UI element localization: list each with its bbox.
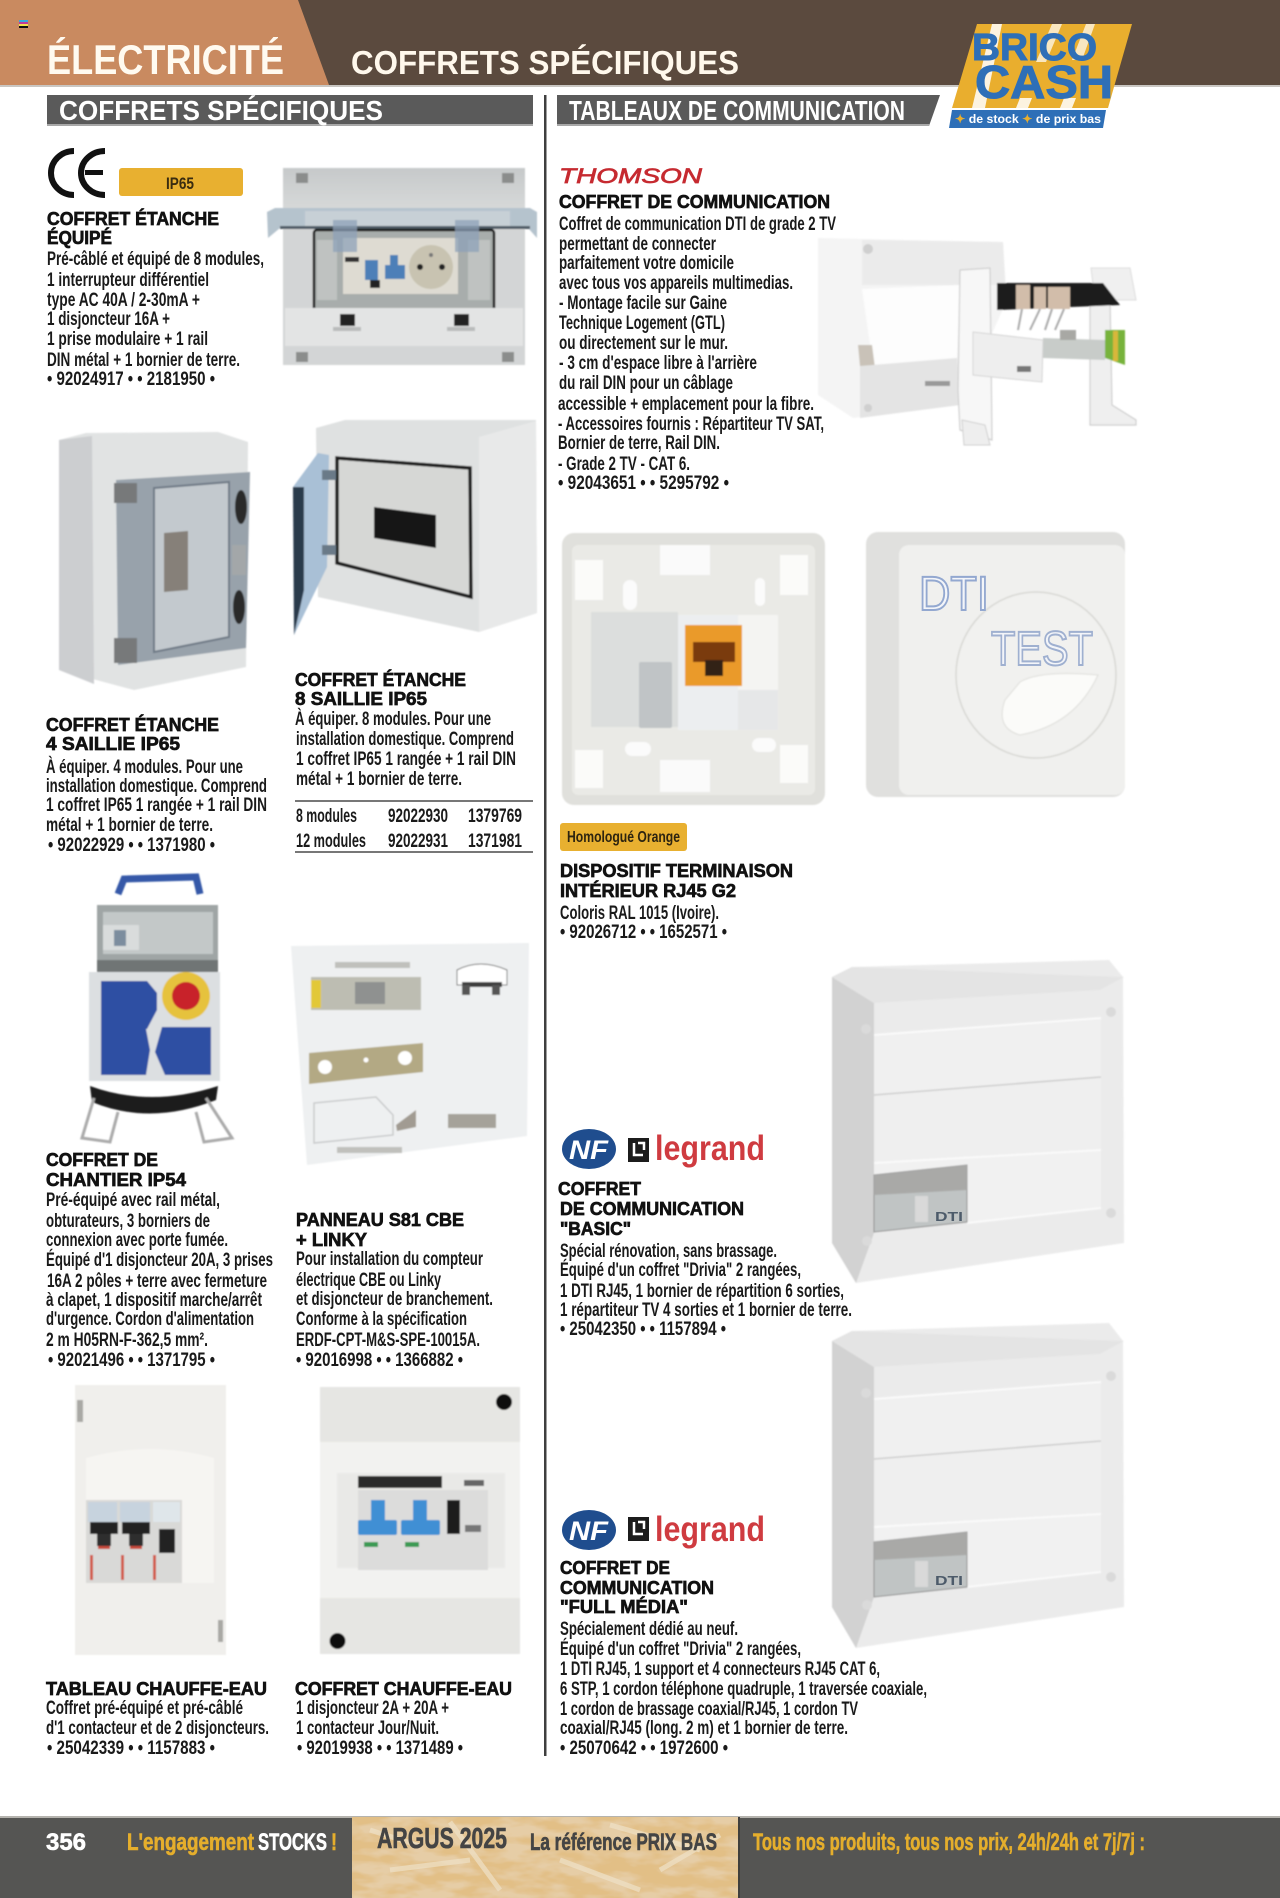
- text: dispositif terminaison: • 92026712 • • 1652571 •: [560, 922, 727, 943]
- heading: coffrets spécifiques: COFFRETS SPÉCIFIQUES: [59, 95, 383, 126]
- logo: NF legrand basic: [562, 1129, 765, 1169]
- text: coffret de chantier: 16A 2 pôles + terre avec fermeture: [47, 1271, 267, 1292]
- text: coffret étanche équipé: Pré-câblé et équipé de 8 modules,: [47, 249, 264, 270]
- text: coffret de communication full média: [560, 1557, 927, 1759]
- text: coffret étanche équipé: 1 interrupteur différentiel: [47, 270, 209, 291]
- text: coffret de communication Thomson: [558, 191, 836, 494]
- logo: NF legrand basic: NF: [569, 1135, 610, 1165]
- table: références 8 et 12 modules: 8 modules: [296, 806, 357, 827]
- table: références 8 et 12 modules: 92022931: [388, 831, 448, 852]
- label: DTI TEST: TEST: [991, 623, 1093, 676]
- text: coffret chauffe-eau: • 92019938 • • 1371489 •: [297, 1738, 463, 1759]
- text: dispositif terminaison: INTÉRIEUR RJ45 G2: [560, 880, 736, 901]
- product image: coffret étanche 4 saillie: [59, 432, 250, 690]
- text: coffret de communication basic: 1 répartiteur TV 4 sorties et 1 bornier de terre.: [560, 1300, 852, 1321]
- text: coffret étanche 4 saillie: métal + 1 bornier de terre.: [46, 815, 213, 836]
- table: références 8 et 12 modules: 12 modules: [296, 831, 366, 852]
- text: coffret de communication full média: Spécialement dédié au neuf.: [560, 1619, 738, 1640]
- text: coffret étanche 8 saillie: 1 coffret IP65 1 rangée + 1 rail DIN: [296, 749, 516, 770]
- text: coffret de chantier: d'urgence. Cordon d'alimentation: [46, 1309, 254, 1330]
- text: coffret de communication full média: 1 cordon de brassage coaxial/RJ45, 1 cordon TV: [560, 1699, 858, 1720]
- text: coffret de communication Thomson: - Montage facile sur Gaine: [559, 293, 727, 314]
- header band: [0, 0, 1280, 87]
- text: coffret de communication Thomson: ou directement sur le mur.: [559, 333, 728, 354]
- product image: coffret Thomson: [818, 238, 1136, 445]
- table: références 8 et 12 modules: 1379769: [468, 806, 522, 827]
- text: coffret étanche équipé: 1 prise modulaire + 1 rail: [47, 329, 208, 350]
- product image: coffret full média: [832, 1323, 1124, 1648]
- footer: engagement stocks: STOCKS: [258, 1829, 327, 1856]
- logo: NF legrand full média: legrand: [655, 1510, 765, 1549]
- badge: homologué orange: Homologué Orange: [567, 829, 680, 846]
- text: coffret étanche équipé: DIN métal + 1 bornier de terre.: [47, 350, 240, 371]
- text: coffret étanche 8 saillie: installation domestique. Comprend: [296, 729, 514, 750]
- table: références 8 et 12 modules: 1371981: [468, 831, 522, 852]
- text: dispositif terminaison: Coloris RAL 1015 (Ivoire).: [560, 903, 719, 924]
- text: coffret de communication Thomson: parfaitement votre domicile: [559, 253, 734, 274]
- text: coffret étanche 8 saillie: À équiper. 8 modules. Pour une: [295, 708, 491, 730]
- label: DTI TEST: DTI: [919, 568, 989, 621]
- text: coffret étanche 4 saillie: 4 SAILLIE IP65: [46, 733, 180, 754]
- text: coffret de communication Thomson: COFFRET DE COMMUNICATION: [559, 191, 830, 212]
- product image: coffret étanche équipé: [267, 168, 537, 365]
- text: panneau S81 CBE + Linky: + LINKY: [296, 1229, 368, 1250]
- text: coffret de chantier: connexion avec porte fumée.: [46, 1230, 228, 1251]
- text: panneau S81 CBE + Linky: [296, 1209, 493, 1371]
- text: tableau chauffe-eau: TABLEAU CHAUFFE-EAU: [46, 1678, 267, 1699]
- text: coffret de chantier: [46, 1149, 273, 1371]
- footer band: [0, 1816, 1280, 1898]
- text: panneau S81 CBE + Linky: électrique CBE ou Linky: [296, 1270, 441, 1291]
- logo: NF legrand full média: NF: [569, 1516, 610, 1546]
- text: coffret de communication full média: Équipé d'un coffret "Drivia" 2 rangées,: [560, 1638, 801, 1660]
- text: coffret de communication Thomson: - Grade 2 TV - CAT 6.: [558, 454, 690, 475]
- table: références 8 et 12 modules: [295, 800, 533, 853]
- text: coffret de communication full média: COFFRET DE: [560, 1557, 670, 1578]
- text: coffret étanche 8 saillie: métal + 1 bornier de terre.: [296, 769, 462, 790]
- text: tableau chauffe-eau: d'1 contacteur et de 2 disjoncteurs.: [46, 1718, 269, 1739]
- badge: homologué orange: [560, 823, 687, 851]
- text: coffret de communication Thomson: Bornier de terre, Rail DIN.: [558, 433, 720, 454]
- logo: Brico Cash: [949, 24, 1132, 128]
- text: coffret de communication full média: "FULL MÉDIA": [560, 1596, 688, 1617]
- text: coffret de communication full média: COMMUNICATION: [560, 1577, 714, 1598]
- text: coffret étanche 4 saillie: À équiper. 4 modules. Pour une: [46, 756, 243, 778]
- footer: engagement stocks: L'engagement: [127, 1829, 254, 1856]
- text: coffret de communication Thomson: Coffret de communication DTI de grade 2 TV: [559, 214, 836, 235]
- product image: tableau chauffe-eau: [75, 1385, 226, 1655]
- logo: NF legrand full média: [562, 1510, 765, 1550]
- text: coffret de chantier: • 92021496 • • 1371795 •: [48, 1350, 215, 1371]
- text: coffret de communication Thomson: du rail DIN pour un câblage: [559, 373, 733, 394]
- text: coffret de communication Thomson: accessible + emplacement pour la fibre.: [558, 394, 814, 415]
- product image: DTI test: [866, 532, 1125, 797]
- text: coffret étanche 4 saillie: • 92022929 • • 1371980 •: [48, 835, 215, 856]
- text: panneau S81 CBE + Linky: PANNEAU S81 CBE: [296, 1209, 464, 1230]
- label: DTI TEST: [919, 568, 1093, 676]
- label: DTI module full média: DTI: [935, 1573, 963, 1588]
- text: coffret de chantier: COFFRET DE: [46, 1149, 158, 1170]
- text: coffret de communication Thomson: permettant de connecter: [559, 234, 716, 255]
- product image: dispositif terminaison RJ45: [562, 533, 825, 805]
- text: panneau S81 CBE + Linky: Pour installation du compteur: [296, 1249, 483, 1270]
- text: coffret de communication basic: DE COMMUNICATION: [560, 1198, 744, 1219]
- text: tableau chauffe-eau: • 25042339 • • 1157883 •: [47, 1738, 215, 1759]
- text: coffret de chantier: Pré-équipé avec rail métal,: [46, 1190, 220, 1211]
- text: coffret étanche équipé: ÉQUIPÉ: [47, 227, 112, 248]
- text: panneau S81 CBE + Linky: et disjoncteur de branchement.: [296, 1289, 493, 1310]
- text: panneau S81 CBE + Linky: ERDF-CPT-M&S-SPE-10015A.: [296, 1330, 480, 1351]
- text: coffret de communication full média: coaxial/RJ45 (long. 2 m) et 1 bornier de terre.: [560, 1718, 848, 1739]
- text: coffret de communication basic: [558, 1178, 852, 1340]
- text: coffret étanche 8 saillie: 8 SAILLIE IP65: [295, 688, 427, 709]
- text: panneau S81 CBE + Linky: Conforme à la spécification: [296, 1309, 467, 1330]
- text: coffret de communication basic: • 25042350 • • 1157894 •: [560, 1319, 726, 1340]
- text: coffret étanche 8 saillie: [295, 669, 516, 790]
- icon: CE mark: [51, 151, 105, 195]
- text: coffret étanche équipé: [47, 208, 264, 390]
- header band: ÉLECTRICITÉ: [47, 36, 284, 83]
- text: dispositif terminaison: DISPOSITIF TERMINAISON: [560, 860, 793, 881]
- footer: argus 2025: [377, 1823, 717, 1856]
- text: coffret étanche 4 saillie: installation domestique. Comprend: [46, 776, 267, 797]
- text: coffret étanche équipé: type AC 40A / 2-30mA +: [47, 290, 200, 311]
- product image: coffret basic: [832, 960, 1124, 1283]
- header band: COFFRETS SPÉCIFIQUES: [351, 44, 739, 81]
- text: coffret de communication basic: COFFRET: [558, 1178, 642, 1199]
- logo: NF legrand basic: legrand: [655, 1129, 765, 1168]
- footer: engagement stocks: !: [331, 1829, 337, 1856]
- text: tableau chauffe-eau: [46, 1678, 269, 1759]
- table: références 8 et 12 modules: 92022930: [388, 806, 448, 827]
- text: coffret étanche équipé: COFFRET ÉTANCHE: [47, 208, 219, 229]
- text: coffret de communication full média: 6 STP, 1 cordon téléphone quadruple, 1 traversée coaxiale,: [560, 1679, 927, 1700]
- text: coffret de chantier: 2 m H05RN-F-362,5 mm².: [46, 1330, 208, 1351]
- text: coffret chauffe-eau: COFFRET CHAUFFE-EAU: [295, 1678, 512, 1699]
- text: coffret de chantier: CHANTIER IP54: [46, 1169, 187, 1190]
- logo: Brico Cash: ✦ de stock ✦ de prix bas: [955, 112, 1101, 126]
- footer: argus 2025: ARGUS 2025: [377, 1823, 507, 1855]
- product image: coffret chauffe-eau: [320, 1387, 520, 1654]
- text: coffret de communication basic: "BASIC": [560, 1218, 631, 1239]
- logo: Thomson: THOMSON: [559, 165, 703, 188]
- product image: coffret de chantier: [82, 877, 232, 1142]
- text: tableau chauffe-eau: Coffret pré-équipé et pré-câblé: [46, 1698, 243, 1719]
- label: DTI module basic: DTI: [935, 1209, 963, 1224]
- text: coffret de chantier: obturateurs, 3 borniers de: [46, 1211, 210, 1232]
- text: coffret de communication Thomson: - Accessoires fournis : Répartiteur TV SAT,: [558, 414, 824, 435]
- text: coffret de communication basic: Spécial rénovation, sans brassage.: [560, 1241, 777, 1262]
- text: coffret étanche 4 saillie: 1 coffret IP65 1 rangée + 1 rail DIN: [46, 795, 267, 816]
- heading: tableaux de communication: TABLEAUX DE COMMUNICATION: [569, 95, 905, 126]
- text: coffret de communication basic: 1 DTI RJ45, 1 bornier de répartition 6 sorties,: [560, 1281, 844, 1302]
- product image: coffret étanche 8 saillie: [293, 420, 537, 635]
- text: coffret de communication Thomson: - 3 cm d'espace libre à l'arrière: [559, 353, 757, 374]
- text: dispositif terminaison: [560, 860, 793, 943]
- text: panneau S81 CBE + Linky: • 92016998 • • 1366882 •: [296, 1350, 463, 1371]
- text: coffret étanche 4 saillie: [46, 714, 267, 856]
- text: coffret de communication full média: 1 DTI RJ45, 1 support et 4 connecteurs RJ45 CAT 6,: [560, 1659, 880, 1680]
- text: coffret de chantier: Équipé d'1 disjoncteur 20A, 3 prises: [46, 1249, 273, 1271]
- text: coffret étanche 8 saillie: COFFRET ÉTANCHE: [295, 669, 466, 690]
- text: coffret étanche équipé: • 92024917 • • 2181950 •: [47, 369, 215, 390]
- text: coffret étanche équipé: 1 disjoncteur 16A +: [47, 309, 170, 330]
- badge: IP65: [119, 168, 243, 196]
- text: coffret de communication full média: • 25070642 • • 1972600 •: [560, 1738, 728, 1759]
- text: coffret chauffe-eau: [295, 1678, 512, 1759]
- text: coffret de communication Thomson: • 92043651 • • 5295792 •: [558, 473, 729, 494]
- text: coffret de communication Thomson: avec tous vos appareils multimedias.: [559, 273, 793, 294]
- text: coffret de communication Thomson: Technique Logement (GTL): [559, 313, 725, 334]
- logo: Brico Cash: BRICO: [972, 27, 1097, 69]
- footer: page number: 356: [46, 1829, 86, 1856]
- column divider: [544, 95, 546, 1756]
- text: coffret étanche 4 saillie: COFFRET ÉTANCHE: [46, 714, 219, 735]
- text: coffret chauffe-eau: 1 disjoncteur 2A + 20A +: [296, 1698, 449, 1719]
- logo: Brico Cash: CASH: [975, 56, 1113, 108]
- text: coffret de chantier: à clapet, 1 dispositif marche/arrêt: [46, 1290, 262, 1311]
- badge: IP65: IP65: [166, 174, 194, 193]
- text: coffret de communication basic: Équipé d'un coffret "Drivia" 2 rangées,: [560, 1259, 801, 1281]
- text: coffret chauffe-eau: 1 contacteur Jour/Nuit.: [296, 1718, 439, 1739]
- footer: argus 2025: La référence PRIX BAS: [530, 1829, 717, 1856]
- product image: panneau S81 CBE + Linky: [291, 943, 529, 1165]
